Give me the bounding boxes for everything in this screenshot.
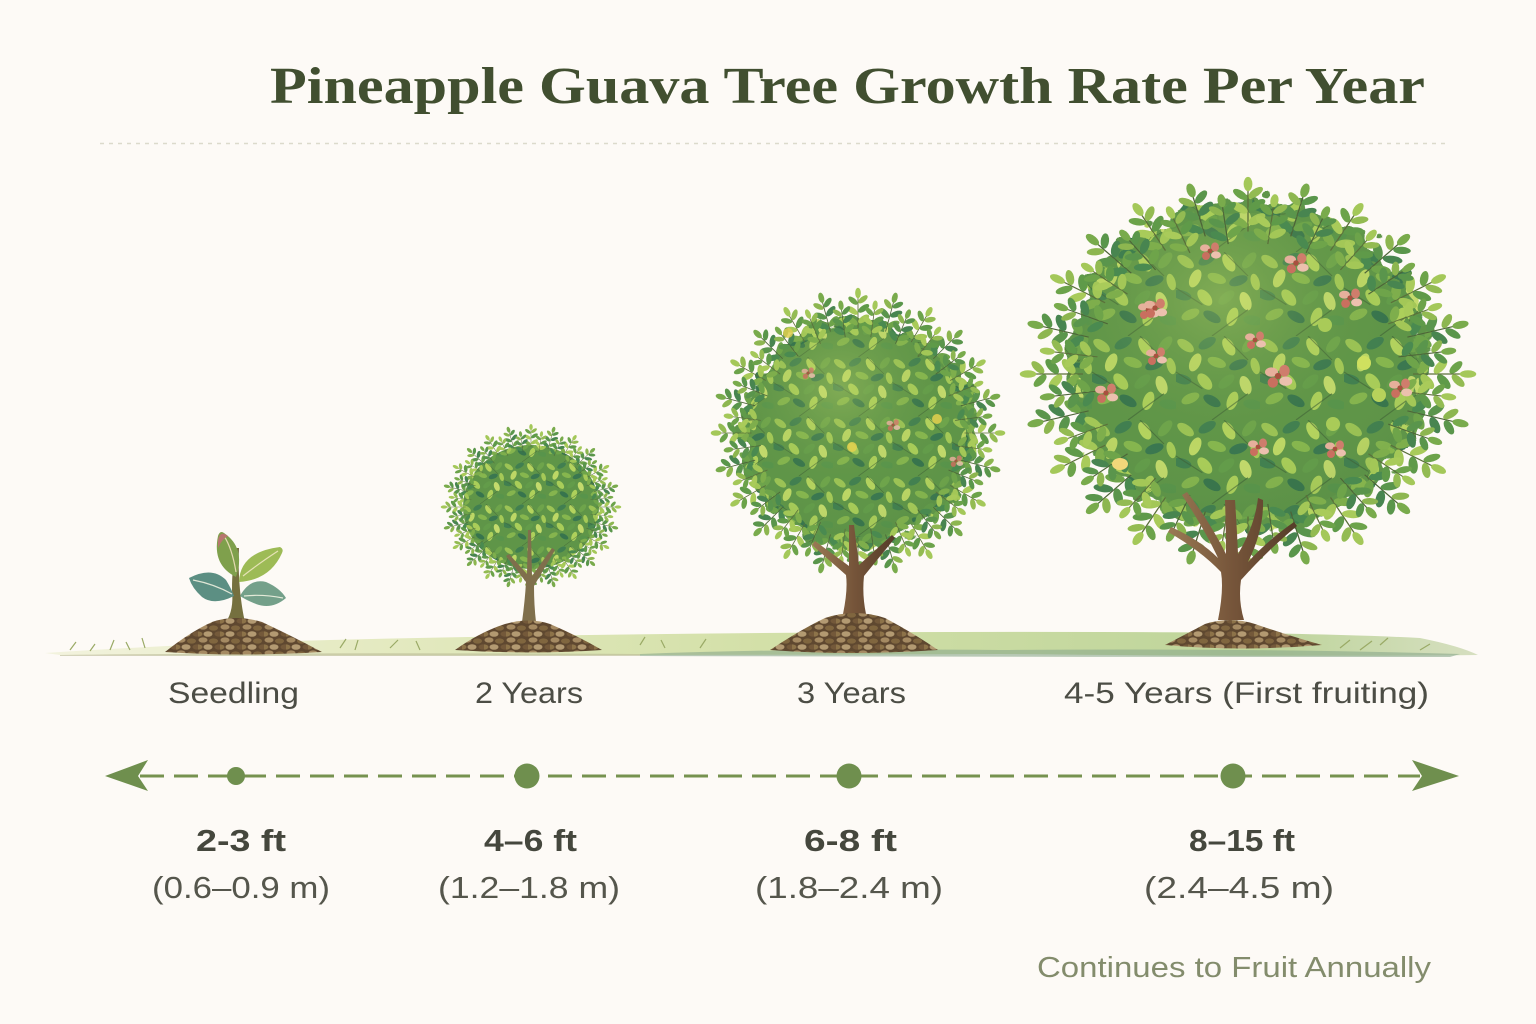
footnote: Continues to Fruit Annually xyxy=(1037,952,1432,984)
left arrowhead xyxy=(105,760,148,791)
soil mound: 3 years xyxy=(770,613,938,653)
marker: 3 years xyxy=(836,764,862,788)
height metric: 4-5 years: (2.4–4.5 m) xyxy=(1144,870,1334,905)
marker: 4-5 years xyxy=(1220,764,1246,788)
crown: 2 years xyxy=(439,422,623,592)
crown: 4-5 years xyxy=(1015,173,1481,575)
label: 4-5 years: 4-5 Years (First fruiting) xyxy=(1064,677,1429,710)
title: Pineapple Guava Tree Growth Rate Per Year xyxy=(270,58,1425,115)
marker: 2 years xyxy=(514,764,540,788)
label: 2 years: 2 Years xyxy=(475,677,583,710)
tree: seedling xyxy=(165,532,322,654)
timeline xyxy=(105,760,1459,791)
blossoms: 4-5 years xyxy=(1095,242,1412,470)
stage labels xyxy=(168,677,1429,710)
height: seedling: 2-3 ft xyxy=(196,823,286,858)
tree: 4-5 years xyxy=(1015,173,1481,648)
trunk: 4-5 years xyxy=(1168,492,1297,620)
height metric: 2 years: (1.2–1.8 m) xyxy=(438,870,620,905)
seedling leaves xyxy=(189,532,286,606)
heights xyxy=(152,823,1334,905)
soil mound: 4-5 years xyxy=(1165,620,1322,648)
right arrowhead xyxy=(1412,760,1459,791)
label: 3 years: 3 Years xyxy=(797,677,906,710)
ground strip xyxy=(45,632,1478,657)
tree: 3 years xyxy=(708,285,1008,653)
label: seedling: Seedling xyxy=(168,677,299,710)
seedling stem xyxy=(226,548,245,622)
soil mound: seedling xyxy=(165,618,322,654)
tree: 2 years xyxy=(439,422,623,652)
height metric: 3 years: (1.8–2.4 m) xyxy=(755,870,943,905)
height: 4-5 years: 8–15 ft xyxy=(1189,823,1295,858)
crown: 3 years xyxy=(708,285,1008,581)
blossoms: 3 years xyxy=(783,328,963,467)
soil mound: 2 years xyxy=(455,620,602,652)
trunk: 2 years xyxy=(506,530,555,622)
height: 3 years: 6-8 ft xyxy=(804,823,897,858)
timeline dashed line xyxy=(140,774,1420,778)
height: 2 years: 4–6 ft xyxy=(484,823,577,858)
trunk: 3 years xyxy=(812,525,895,614)
height metric: seedling: (0.6–0.9 m) xyxy=(152,870,330,905)
marker: seedling xyxy=(227,767,245,785)
